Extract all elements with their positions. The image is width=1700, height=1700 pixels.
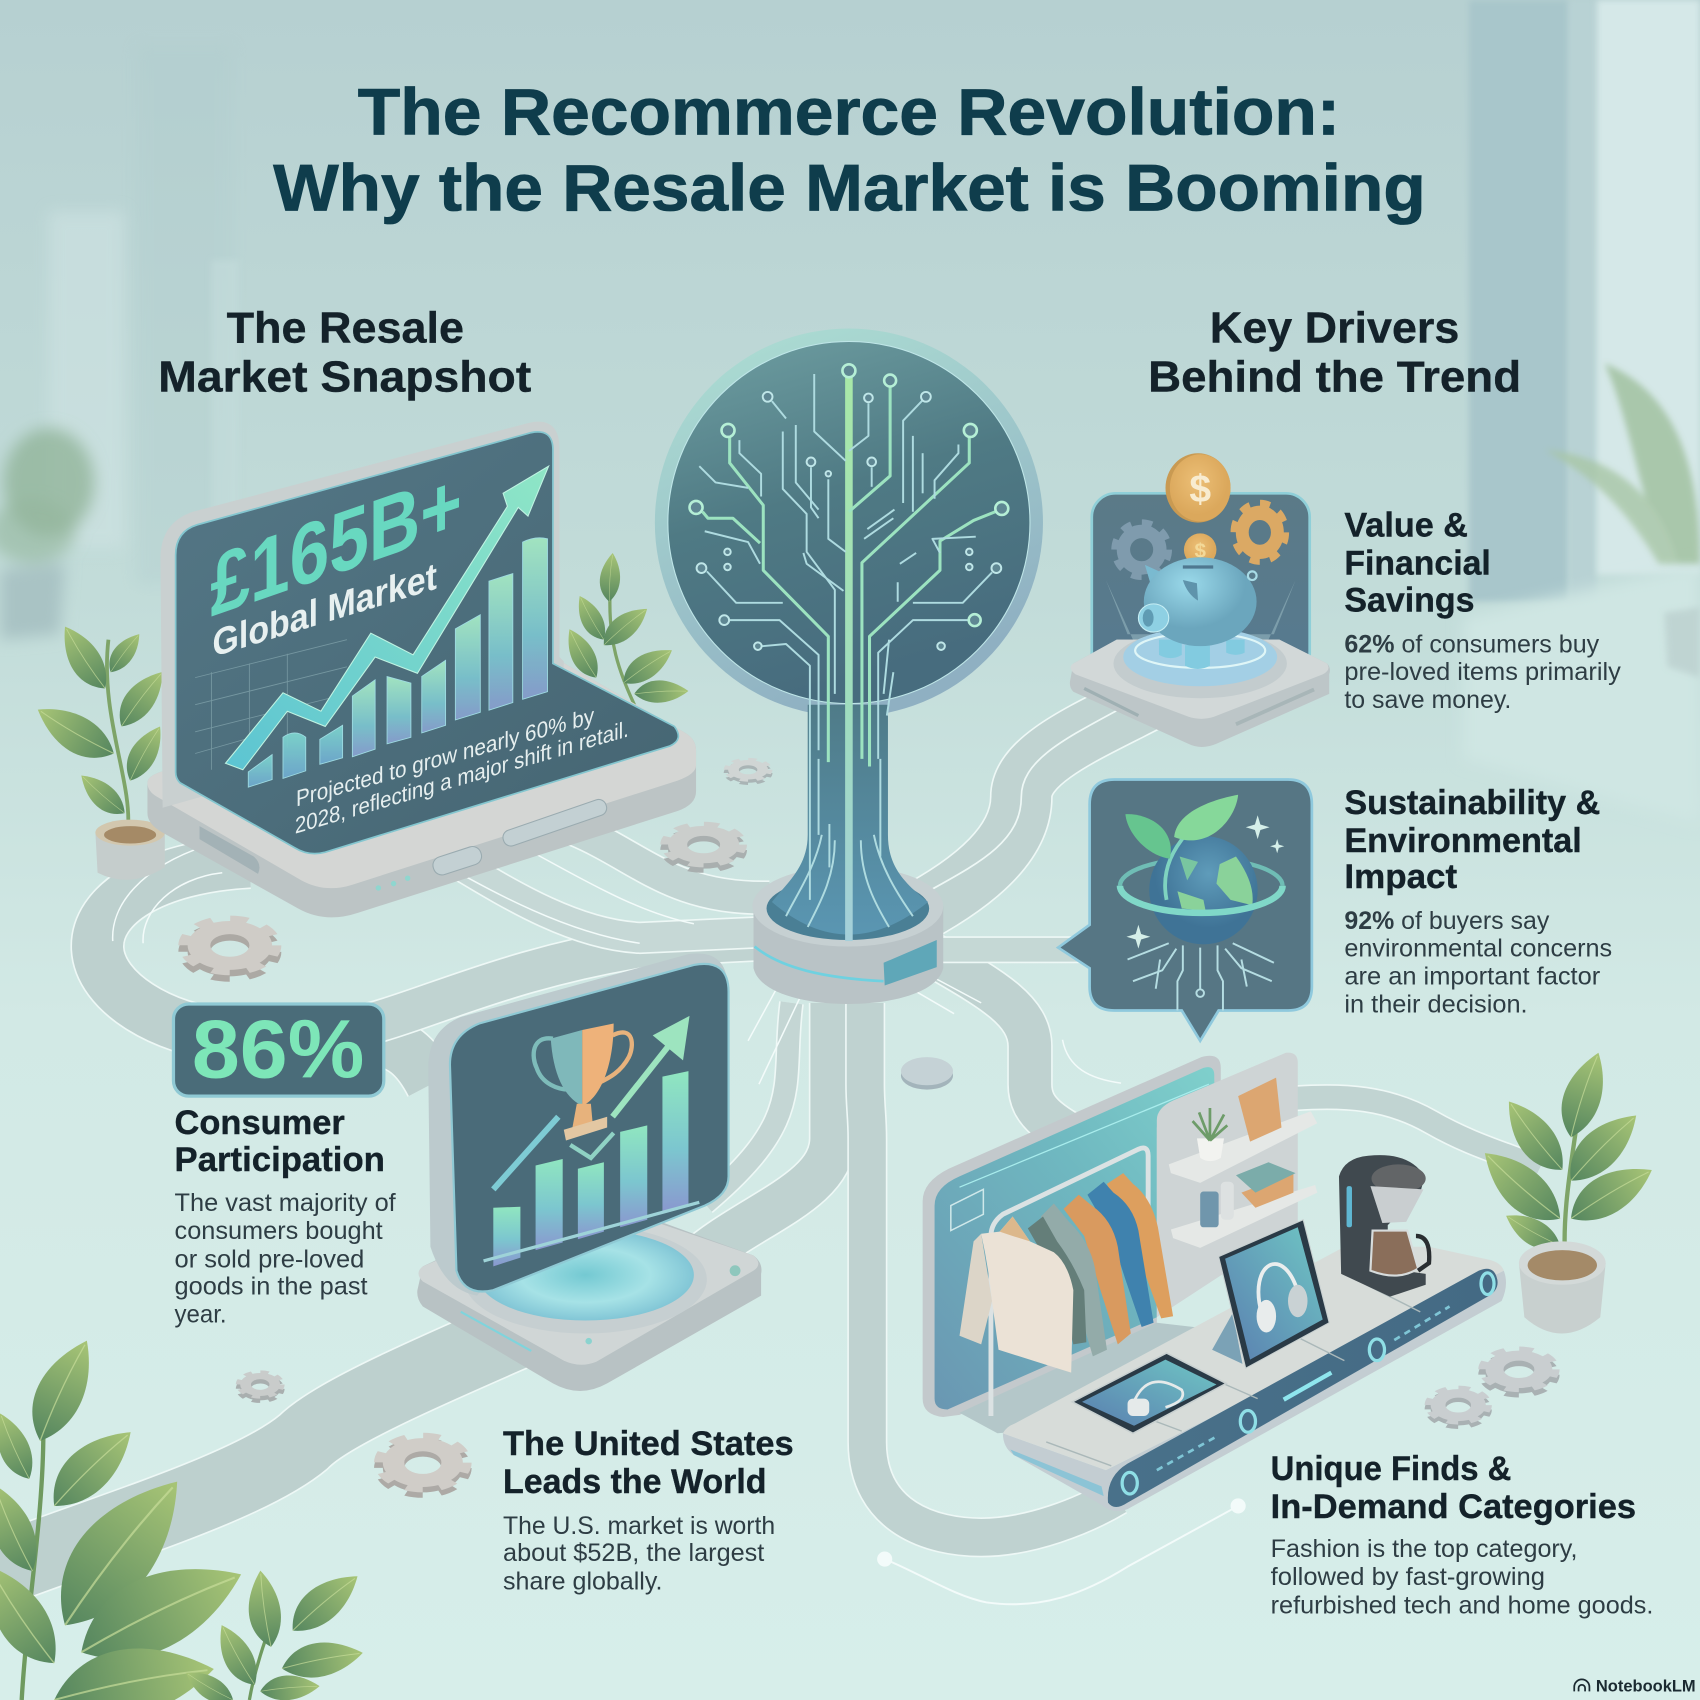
device screen [176, 432, 678, 854]
text: value and savings: 62% of consumers buy [1344, 631, 1600, 659]
title: Why the Resale Market is Booming [273, 151, 1426, 225]
trophy [534, 1023, 632, 1158]
connector paths [0, 694, 1540, 1604]
heading: key drivers: Key Drivers [1210, 305, 1459, 353]
gear grey [1115, 523, 1168, 576]
centre trunk stripe [845, 377, 853, 941]
trophy device screen [450, 964, 729, 1291]
tree crown [655, 329, 1043, 717]
panel: value and savings [1070, 453, 1330, 747]
text: unique finds: Fashion is the top category, [1271, 1535, 1577, 1563]
speech bubble panel [1058, 780, 1312, 1041]
coin small [1184, 533, 1216, 566]
trophy chart bars [493, 1071, 688, 1266]
plant right [1470, 1047, 1661, 1334]
stat: global market: £165B+ [210, 452, 462, 635]
text: united states [503, 1425, 794, 1595]
text: consumer participation: Consumer [175, 1104, 345, 1142]
text: united states: The United States [503, 1425, 794, 1463]
text: sustainability: are an important factor [1344, 962, 1600, 990]
trophy device [417, 953, 761, 1391]
panel: sustainability [1058, 780, 1312, 1041]
plant bottom left [0, 1330, 368, 1700]
text: consumer participation [175, 1104, 396, 1329]
trophy device frame [428, 953, 726, 1296]
gears [185, 759, 1555, 1494]
storefront scene [923, 1053, 1506, 1511]
hanging clothes [960, 1173, 1173, 1373]
plant left of device [28, 619, 173, 880]
text: unique finds: In-Demand Categories [1271, 1488, 1636, 1526]
heading: snapshot: Market Snapshot [158, 353, 531, 401]
globe [1149, 836, 1258, 944]
text: sustainability: Environmental [1344, 822, 1582, 860]
text: sustainability: Sustainability & [1344, 784, 1600, 822]
gear gold [1234, 504, 1286, 561]
text: unique finds [1271, 1450, 1653, 1619]
orbit ring front [1120, 886, 1283, 913]
text: consumer participation: year. [175, 1301, 227, 1329]
text: sustainability: in their decision. [1344, 991, 1528, 1019]
device caption: Projected to grow nearly 60% by [296, 702, 594, 812]
rising bars [248, 538, 548, 787]
text: sustainability: environmental concerns [1344, 934, 1612, 962]
text: value and savings: Savings [1344, 581, 1474, 619]
blurred plant left [0, 428, 94, 640]
clothes rack [991, 1148, 1148, 1416]
text: united states: The U.S. market is worth [503, 1512, 775, 1540]
flat tablet [1072, 1353, 1226, 1433]
connector end dots [877, 1498, 1246, 1567]
text: united states: share globally. [503, 1567, 662, 1595]
text: value and savings: pre-loved items primarily [1344, 658, 1621, 686]
text: consumer participation: or sold pre-loved [175, 1245, 364, 1273]
text: value and savings: Value & [1344, 507, 1468, 545]
heading: key drivers [1148, 305, 1521, 401]
chart grid [195, 640, 347, 770]
title: The Recommerce Revolution: [358, 75, 1340, 149]
heading: snapshot [158, 305, 531, 401]
label: global market: Global Market [212, 555, 437, 666]
shelf unit [1157, 1053, 1317, 1317]
leaf sprout [1125, 795, 1238, 900]
coin large: $ [1189, 468, 1211, 511]
text: consumer participation: The vast majority of [175, 1189, 396, 1217]
text: sustainability: 92% of buyers say [1344, 907, 1550, 935]
branch circuit traces [699, 374, 995, 927]
device base [147, 651, 696, 917]
text: consumer participation: goods in the past [175, 1273, 368, 1301]
market device [147, 422, 696, 917]
text: unique finds: refurbished tech and home goods. [1271, 1591, 1653, 1619]
tree base cylinder [752, 866, 943, 1004]
roots and sparkles [1126, 815, 1284, 1010]
circuit tree [655, 329, 1043, 1004]
text: sustainability: Impact [1344, 858, 1457, 896]
heading: key drivers: Behind the Trend [1148, 353, 1521, 401]
piggy bank [1138, 557, 1257, 669]
circuit nodes [690, 364, 1008, 650]
title [273, 75, 1426, 225]
store screen [923, 1056, 1221, 1417]
text: consumer participation: Participation [175, 1141, 385, 1179]
text: united states: Leads the World [503, 1463, 767, 1501]
orbit ring back [1120, 859, 1283, 886]
text: consumer participation: consumers bought [175, 1217, 383, 1245]
text: united states: about $52B, the largest [503, 1539, 764, 1567]
device screen frame [160, 422, 564, 808]
trophy chart baseline [484, 1202, 699, 1261]
tree trunk [772, 705, 928, 935]
floor under rack [960, 1323, 1203, 1433]
trophy chart arrow [493, 1016, 690, 1189]
standing tablet with headphones [1212, 1220, 1329, 1368]
device caption: 2028, reflecting a major shift in retail. [295, 716, 629, 839]
coin large [1165, 453, 1231, 523]
stat: consumer participation: 86% [192, 1004, 364, 1096]
heading: snapshot: The Resale [227, 305, 464, 353]
coin small: $ [1194, 539, 1206, 562]
piggy platform [1070, 628, 1330, 747]
text: sustainability [1344, 784, 1612, 1019]
conveyor belt [1003, 1247, 1506, 1511]
growth arrow [226, 466, 549, 770]
light beams [1106, 580, 1296, 640]
trophy device base [417, 1193, 761, 1391]
text: value and savings: Financial [1344, 545, 1491, 583]
text: value and savings: to save money. [1344, 686, 1511, 714]
piggy backdrop [1092, 493, 1310, 678]
NotebookLM mark: NotebookLM [1596, 1676, 1696, 1695]
text: unique finds: followed by fast-growing [1271, 1563, 1545, 1591]
small plant behind device [559, 552, 689, 716]
text: value and savings [1344, 507, 1621, 714]
blurred plant right [1545, 363, 1700, 678]
text: unique finds: Unique Finds & [1271, 1450, 1511, 1488]
coffee maker [1339, 1155, 1429, 1297]
